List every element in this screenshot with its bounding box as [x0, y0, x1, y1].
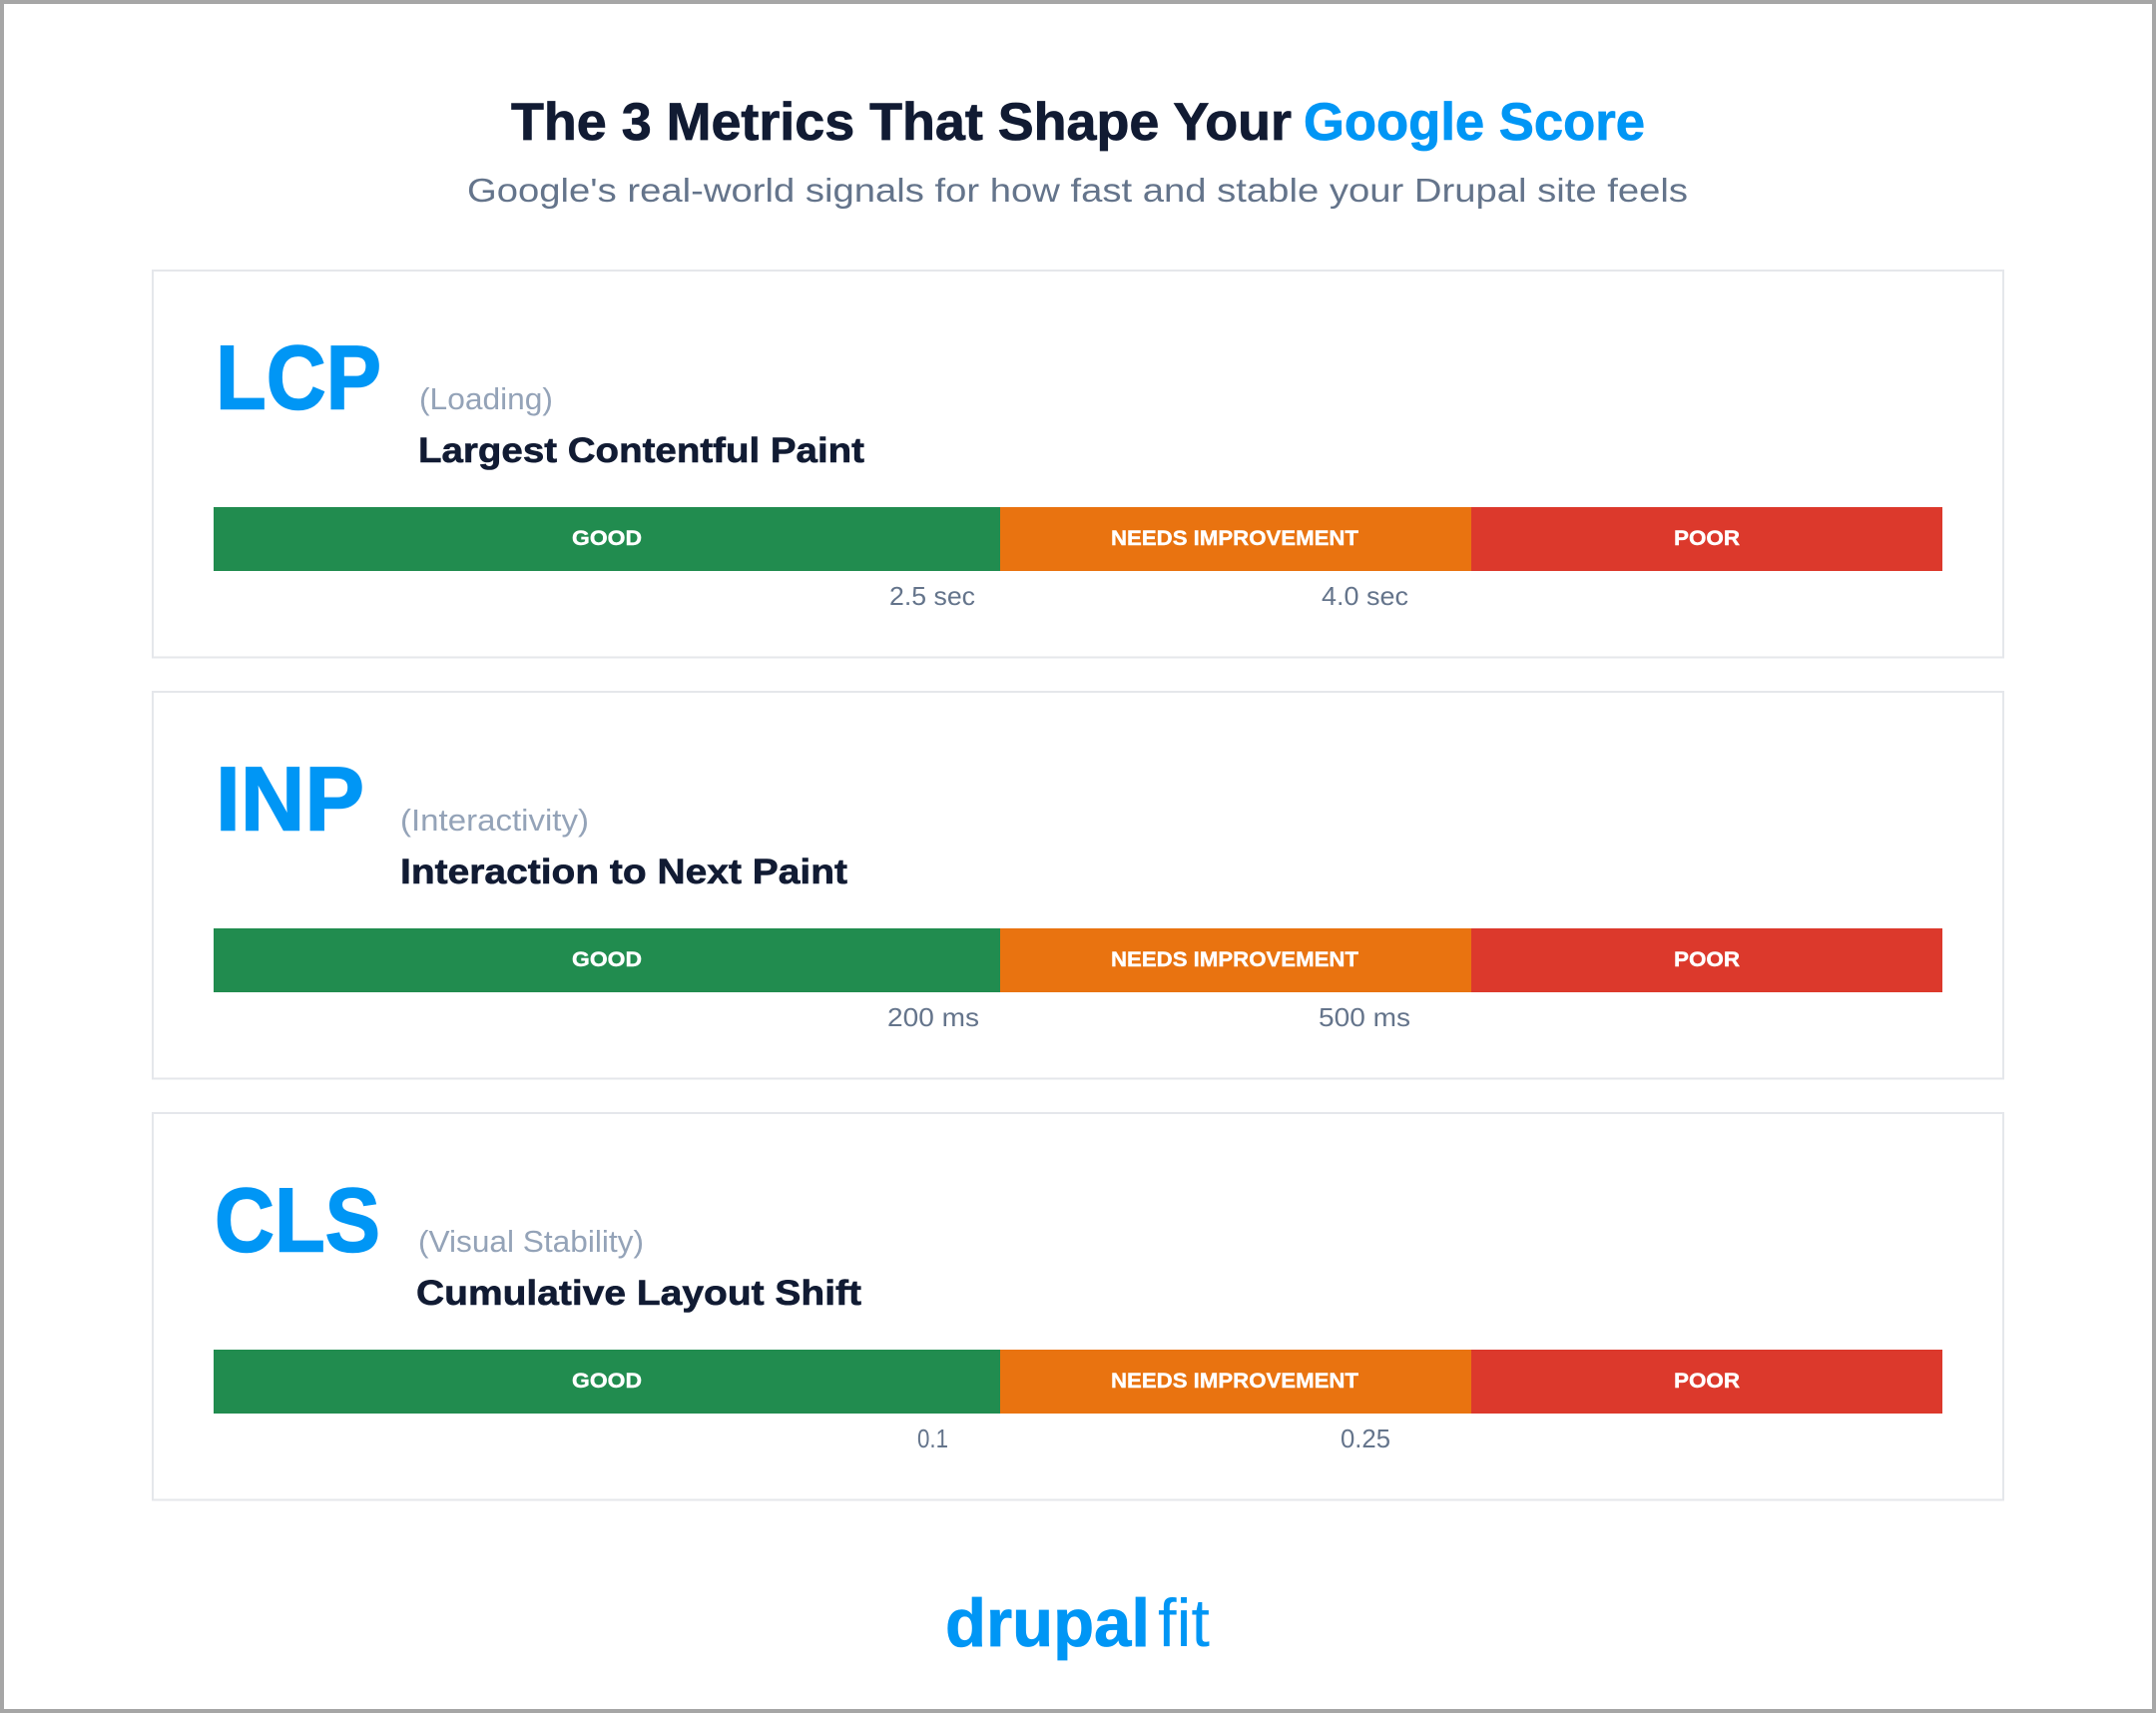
LCP threshold values: 2.5 sec: [889, 581, 975, 611]
INP threshold values: 200 ms: [887, 1002, 979, 1032]
CLS threshold values: 0.25: [1341, 1424, 1390, 1453]
INP category: (Interactivity): [400, 803, 589, 838]
title: The 3 Metrics That Shape Your: [511, 93, 1292, 152]
CLS full name: Cumulative Layout Shift: [416, 1273, 861, 1313]
LCP threshold values: 4.0 sec: [1322, 581, 1408, 611]
title: [511, 93, 1645, 152]
LCP full name: Largest Contentful Paint: [418, 430, 864, 470]
INP threshold bar: NEEDS IMPROVEMENT: [1111, 948, 1358, 971]
LCP threshold bar: POOR: [1674, 527, 1740, 550]
title: Google Score: [1304, 93, 1645, 152]
CLS category: (Visual Stability): [418, 1224, 644, 1259]
LCP category: (Loading): [419, 381, 553, 416]
INP full name: Interaction to Next Paint: [400, 852, 847, 891]
CLS threshold values: 0.1: [917, 1424, 948, 1453]
CLS threshold values: [917, 1424, 1390, 1453]
INP threshold values: [887, 1002, 1410, 1032]
panel: INP: [153, 692, 2003, 1078]
panel: CLS: [153, 1113, 2003, 1499]
INP threshold bar: GOOD: [572, 948, 642, 971]
logo: drupalfit: fit: [1158, 1585, 1210, 1661]
LCP threshold values: [889, 581, 1408, 611]
INP threshold bar: [214, 928, 1942, 992]
LCP threshold bar: [214, 507, 1942, 571]
CLS threshold bar: NEEDS IMPROVEMENT: [1111, 1370, 1358, 1393]
panel: LCP: [153, 271, 2003, 657]
INP threshold values: 500 ms: [1319, 1002, 1410, 1032]
LCP acronym: LCP: [216, 327, 381, 429]
subtitle: Google's real-world signals for how fast and stable your Drupal site feels: [467, 172, 1688, 209]
LCP threshold bar: NEEDS IMPROVEMENT: [1111, 527, 1358, 550]
CLS threshold bar: [214, 1350, 1942, 1414]
INP acronym: INP: [216, 749, 364, 851]
LCP threshold bar: GOOD: [572, 527, 642, 550]
CLS threshold bar: POOR: [1674, 1370, 1740, 1393]
CLS acronym: CLS: [215, 1170, 380, 1272]
logo: drupalfit: drupal: [945, 1585, 1150, 1661]
CLS threshold bar: GOOD: [572, 1370, 642, 1393]
INP threshold bar: POOR: [1674, 948, 1740, 971]
